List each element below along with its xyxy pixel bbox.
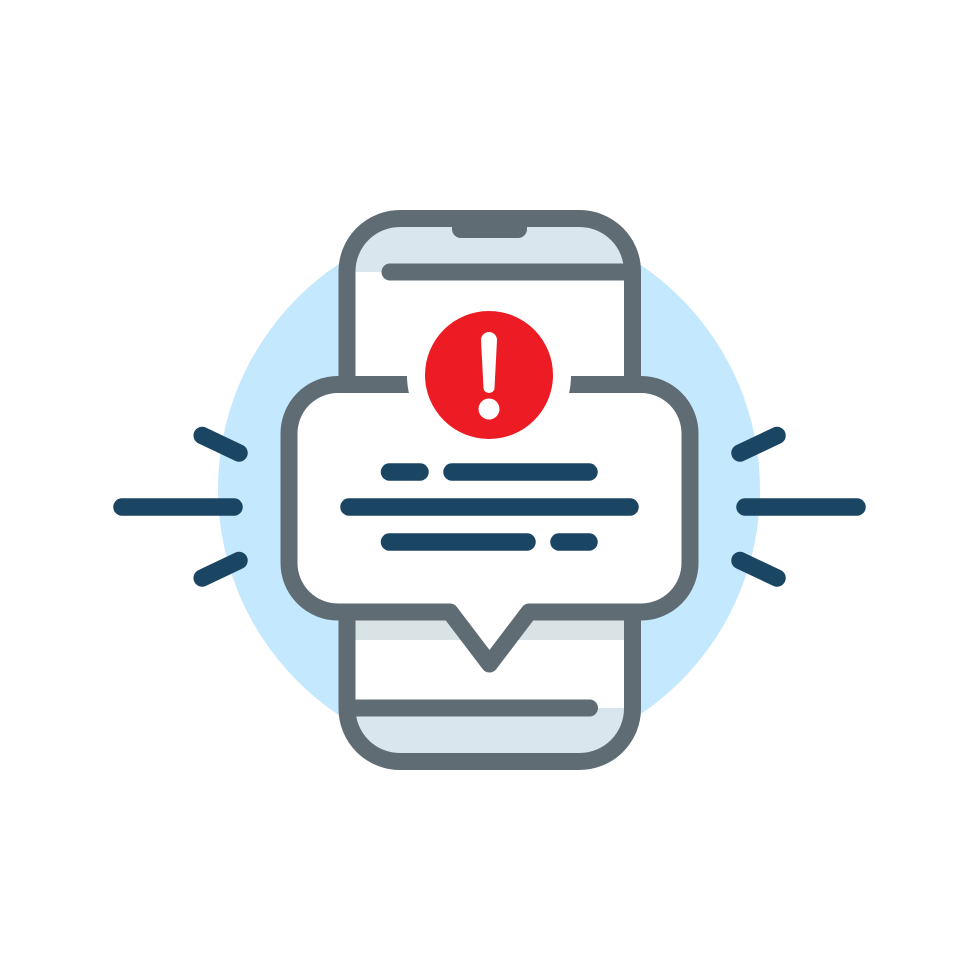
badge disc (425, 311, 553, 439)
phone bottom band fill (347, 708, 632, 762)
phone top band fill (347, 218, 632, 272)
top divider (390, 264, 628, 280)
exclamation mark (481, 332, 497, 393)
right signal rays (740, 436, 857, 578)
speech bubble (289, 384, 690, 664)
shadow under bubble (355, 618, 625, 640)
phone outline (347, 218, 632, 762)
phone screen (347, 218, 632, 762)
badge white ring (407, 294, 571, 458)
message lines (349, 472, 630, 542)
bottom divider (350, 700, 590, 716)
background circle (218, 218, 760, 760)
left signal rays (122, 436, 239, 578)
icon: smartphone (347, 218, 632, 762)
bubble body (289, 384, 690, 664)
phone notch (452, 226, 527, 238)
icon: red alert badge (407, 294, 571, 458)
